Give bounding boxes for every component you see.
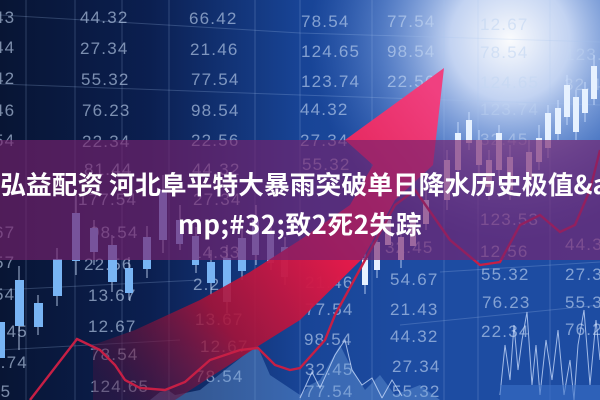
data number columns: 21.46 [190, 40, 239, 59]
data number columns: 81.44 [84, 160, 133, 179]
data number columns: 44.32 [300, 100, 349, 119]
title line one: 弘益配资 河北阜平特大暴雨突破单日降水历史极值&a [0, 165, 600, 202]
data number columns: 12.67 [88, 317, 137, 336]
data number columns: 13.67 [88, 286, 137, 305]
data number columns: 44.32 [80, 8, 129, 27]
data number columns: 27.34 [193, 190, 242, 209]
data number columns: 98.54 [387, 42, 436, 61]
title line two: mp;#32;致2死2失踪 [178, 205, 422, 242]
data number columns: 66.42 [189, 9, 238, 28]
data number columns: 54.67 [390, 270, 439, 289]
data number columns: 44.32 [390, 327, 439, 346]
data number columns: 27.34 [300, 131, 349, 150]
data number columns: 77.54 [305, 300, 354, 319]
data number columns: 124.65 [90, 377, 149, 396]
data number columns: 22.56 [84, 255, 133, 274]
title [0, 165, 600, 242]
data number columns: 55.32 [481, 265, 530, 284]
data number columns: 21.46 [305, 273, 354, 292]
data number columns: 98.54 [304, 330, 353, 349]
data number columns: 32.45 [480, 130, 529, 149]
data number columns: 77.54 [191, 70, 240, 89]
data number columns: 124.65 [480, 73, 539, 92]
data number columns: 98.54 [90, 223, 139, 242]
data number columns: 44.32 [192, 160, 241, 179]
data number columns: 55.32 [81, 70, 130, 89]
data number columns: 78.54 [195, 367, 244, 386]
data number columns: 78.54 [301, 12, 350, 31]
data number columns: 12.56 [480, 242, 529, 261]
data number columns: 123.74 [480, 100, 539, 119]
data number columns: 22.56 [387, 72, 436, 91]
data number columns: 22.34 [481, 322, 530, 341]
data number columns: 13.67 [195, 310, 244, 329]
data number columns: 98.54 [191, 101, 240, 120]
data number columns: 123.74 [301, 72, 360, 91]
data number columns: 32.45 [385, 238, 434, 257]
data number columns: 27.34 [392, 357, 441, 376]
data number columns: 177.54 [78, 190, 137, 209]
data number columns: 12.67 [480, 15, 529, 34]
data number columns: 76.23 [82, 101, 131, 120]
data number columns: 55.32 [302, 155, 351, 174]
data number columns: 14.33 [192, 243, 241, 262]
data number columns: 22.34 [82, 132, 131, 151]
data number columns: 77.54 [387, 12, 436, 31]
data number columns: 124.65 [301, 42, 360, 61]
data number columns: 27.34 [80, 39, 129, 58]
data number columns: 78.54 [90, 345, 139, 364]
data number columns: 12.67 [200, 337, 249, 356]
data number columns: 22.56 [191, 131, 240, 150]
translucent title band [0, 140, 600, 260]
data number columns: 21.43 [390, 300, 439, 319]
data number columns: 76.23 [482, 293, 531, 312]
data number columns: 32.45 [305, 360, 354, 379]
data number columns: 2.2 [193, 275, 220, 294]
data number columns: 78.54 [480, 43, 529, 62]
data number columns: 123.53 [480, 210, 539, 229]
